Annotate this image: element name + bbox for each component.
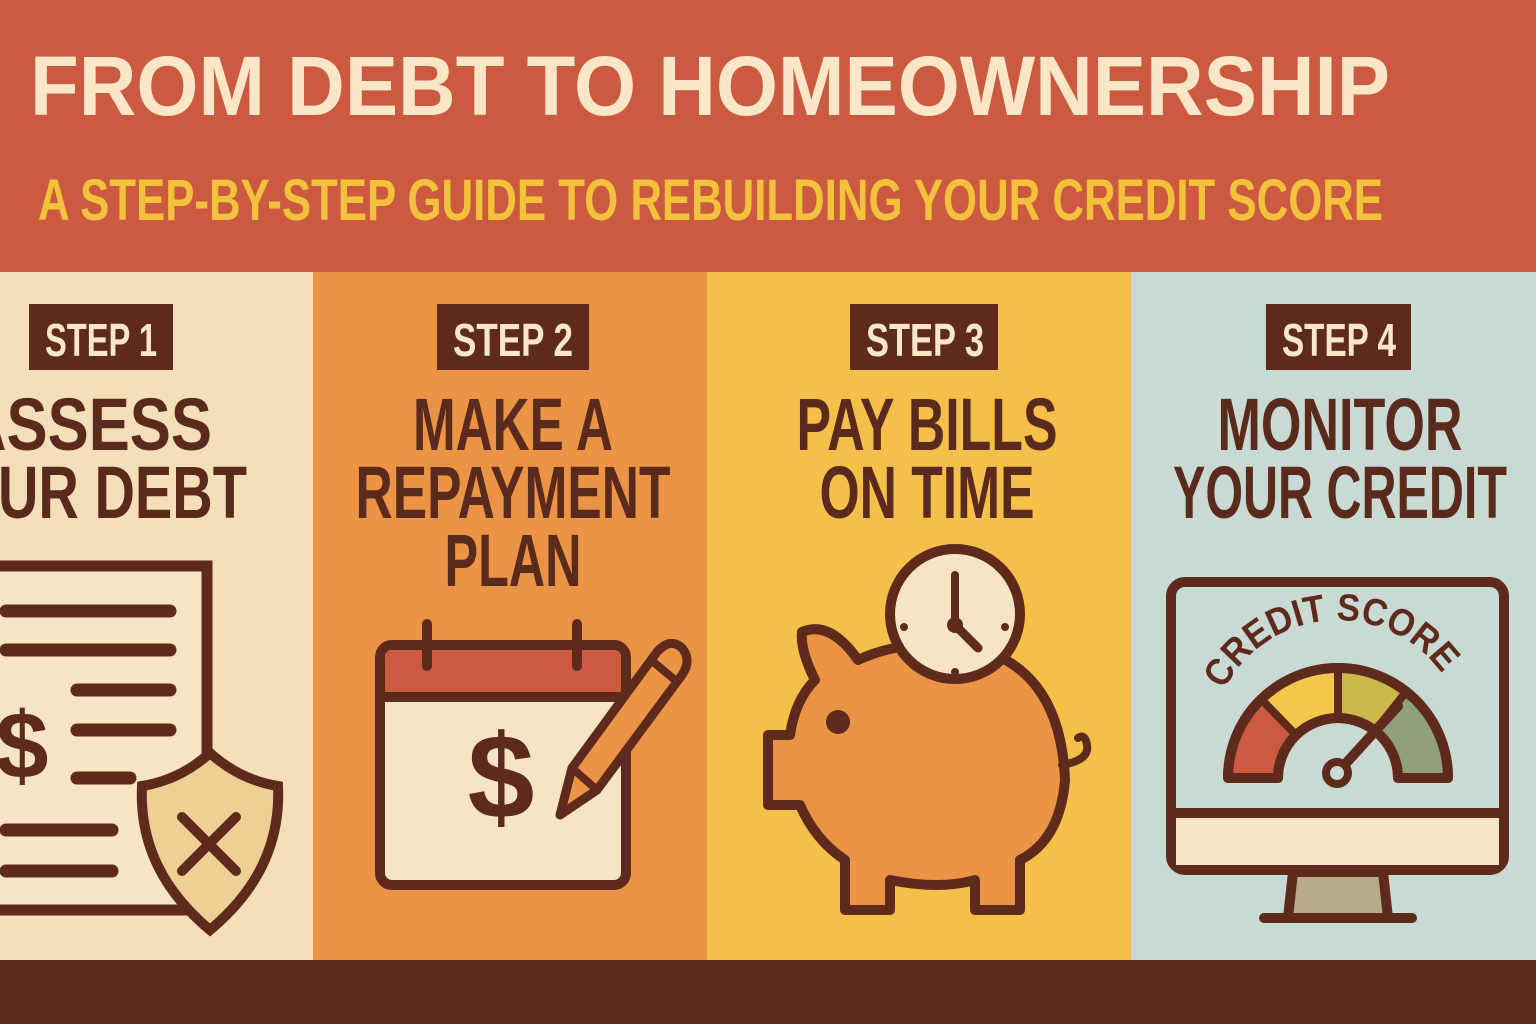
icon: calendar with pencil: $ bbox=[468, 710, 534, 844]
step 1 heading bbox=[0, 383, 247, 534]
step 3 heading: PAY BILLS bbox=[796, 383, 1058, 466]
step 2 heading bbox=[356, 383, 670, 602]
step 4 heading bbox=[1173, 383, 1507, 534]
gauge label bbox=[1224, 620, 1452, 690]
step 1 label: STEP 1 bbox=[45, 314, 157, 366]
header band bbox=[0, 0, 1536, 272]
icon: calendar with pencil bbox=[380, 624, 687, 885]
panel: step 4 bbox=[1131, 272, 1536, 960]
step 3 heading bbox=[796, 383, 1058, 534]
icon: document with shield bbox=[0, 566, 278, 930]
icon: monitor with credit score gauge bbox=[1166, 577, 1509, 923]
step 4 label bbox=[1266, 304, 1411, 370]
step 4 label: STEP 4 bbox=[1282, 314, 1396, 366]
step 3 label bbox=[850, 304, 998, 370]
panel: step 3 bbox=[707, 272, 1131, 960]
gauge bbox=[1228, 668, 1448, 778]
step 2 heading: PLAN bbox=[444, 519, 582, 602]
step 2 label: STEP 2 bbox=[453, 314, 573, 366]
icon: monitor with credit score gauge: CREDIT SCORE bbox=[1206, 594, 1461, 684]
step 3 label: STEP 3 bbox=[866, 314, 984, 366]
footer band bbox=[0, 960, 1536, 1024]
step 3 heading: ON TIME bbox=[820, 451, 1034, 534]
step 1 label bbox=[29, 304, 173, 370]
step 2 heading: REPAYMENT bbox=[356, 451, 670, 534]
panel: step 2 bbox=[313, 272, 707, 960]
step 2 label bbox=[437, 304, 589, 370]
step 2 heading: MAKE A bbox=[413, 383, 613, 466]
title: FROM DEBT TO HOMEOWNERSHIP bbox=[30, 39, 1390, 133]
panel: step 1 bbox=[0, 272, 313, 960]
icon: piggy bank with clock bbox=[768, 549, 1087, 910]
